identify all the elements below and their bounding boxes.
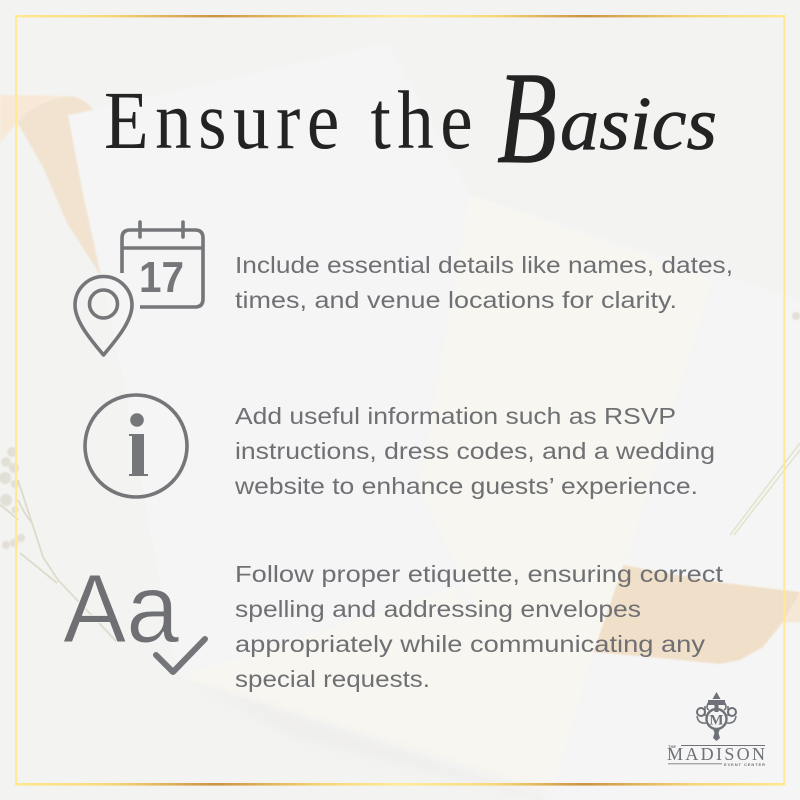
title [104, 44, 717, 191]
text: proper etiquette [235, 561, 724, 692]
icon: information [85, 395, 187, 497]
logo: The Madison Event Center [667, 692, 765, 767]
calendar rings [140, 222, 183, 237]
icon: typography with check mark [63, 554, 205, 672]
icon: calendar and location pin [75, 222, 203, 355]
logo top rule: THE [668, 744, 676, 749]
title: B [497, 44, 557, 191]
text: proper etiquette: appropriately while communicating any [235, 631, 705, 657]
text: essential details: Include essential details like names, dates, [235, 252, 733, 278]
text: useful information: instructions, dress codes, and a wedding [235, 438, 715, 464]
text: proper etiquette: special requests. [235, 666, 430, 692]
text: useful information: website to enhance guests’ experience. [234, 473, 698, 499]
map pin centre [90, 290, 118, 318]
map pin [75, 276, 132, 355]
calendar date: 17 [139, 253, 184, 302]
logo wordmark: MADISON [667, 744, 765, 764]
title: asics [560, 82, 717, 166]
text: essential details: times, and venue locations for clarity. [235, 287, 677, 313]
title: Ensure the [104, 74, 473, 166]
check mark [156, 639, 205, 672]
calendar outline [122, 230, 203, 307]
text: useful information [234, 403, 715, 499]
text: proper etiquette: spelling and addressing envelopes [235, 596, 641, 622]
text: useful information: Add useful information such as RSVP [235, 403, 676, 429]
logo tagline: EVENT CENTER [724, 762, 765, 767]
logo crest: M [709, 712, 724, 728]
letters Aa: Aa [63, 554, 179, 663]
text: proper etiquette: Follow proper etiquette, ensuring correct [235, 561, 724, 587]
text: essential details [235, 252, 733, 313]
